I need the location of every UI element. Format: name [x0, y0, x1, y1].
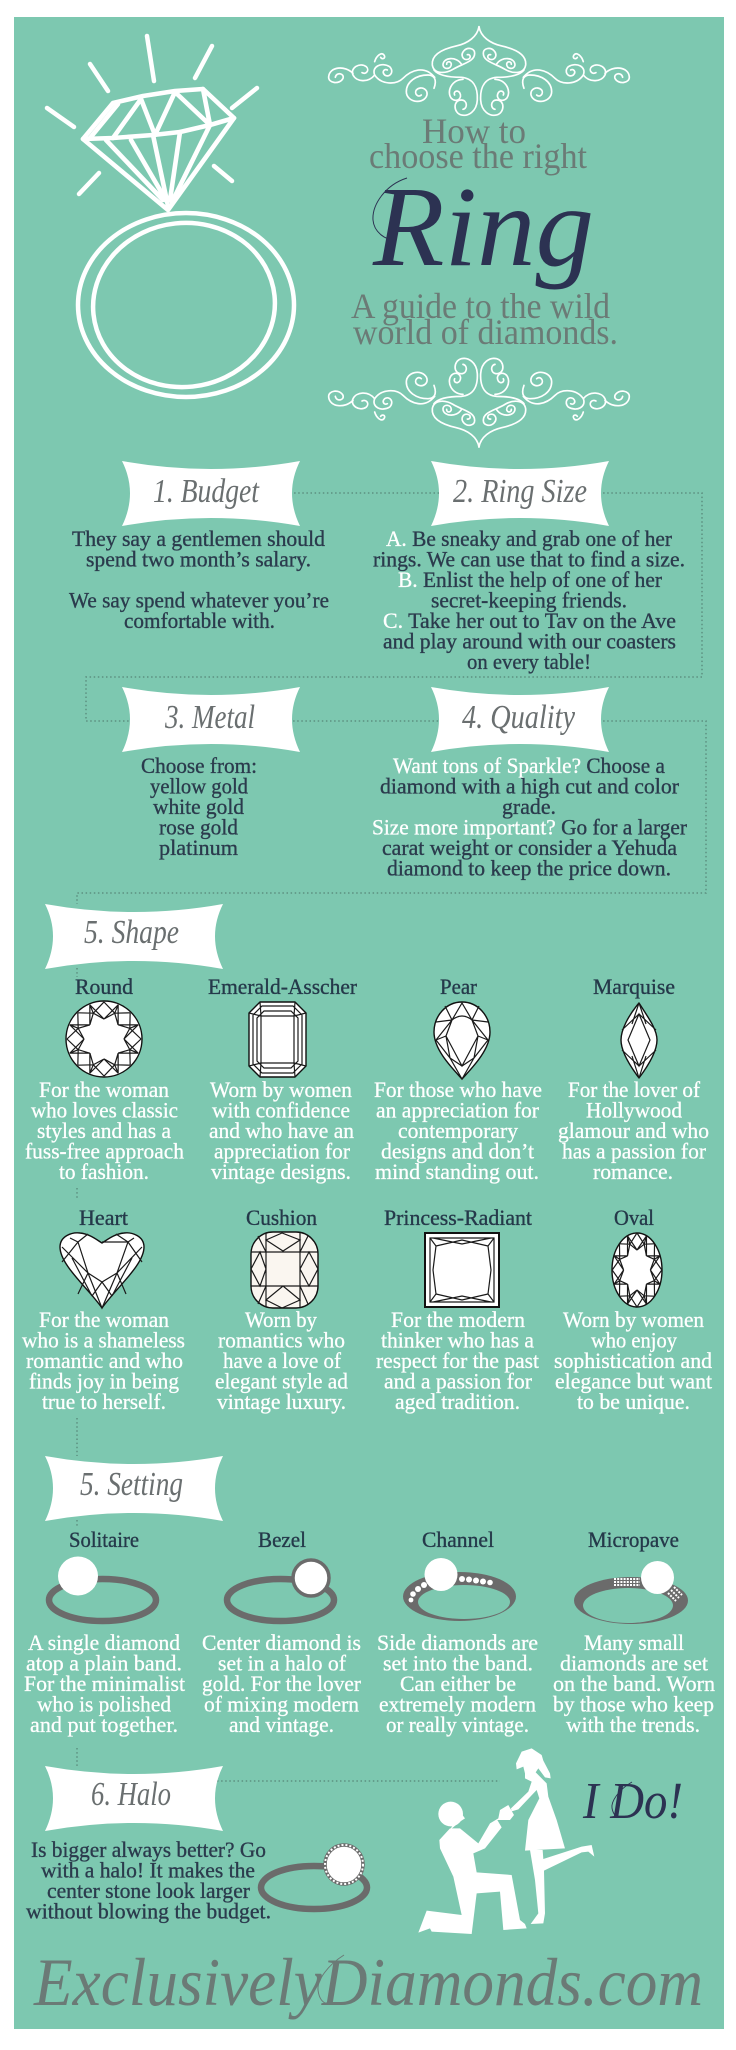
icon: solitaire ring: [49, 1556, 156, 1621]
banner: 1. Budget: 1. Budget: [153, 473, 260, 510]
icon: heart diamond: [60, 1233, 144, 1308]
text: ring size: secret-keeping friends.: [431, 588, 627, 612]
banner: 4. Quality: [431, 687, 609, 752]
text: shape descriptions row 2: [22, 1307, 713, 1414]
text: ring size: B. Enlist the help of one of her: [398, 567, 662, 592]
footer: website: ExclusivelyDiamonds.com: [33, 1944, 703, 2020]
text: setting descriptions: or really vintage.: [386, 1712, 529, 1737]
dotted connector path: [77, 493, 706, 1781]
text: setting descriptions: Side diamonds are: [377, 1630, 538, 1655]
text: shape descriptions row 1: Hollywood: [586, 1098, 682, 1122]
text: setting descriptions: of mixing modern: [204, 1692, 359, 1716]
banner: 3. Metal: 3. Metal: [164, 699, 255, 736]
title: how to choose the right: [369, 111, 587, 176]
text: setting descriptions: set in a halo of: [218, 1650, 346, 1676]
text: shape descriptions row 2: Worn by: [245, 1307, 318, 1332]
text: shape descriptions row 2: sophistication and: [554, 1348, 712, 1373]
text: shape descriptions row 2: romantics who: [218, 1328, 345, 1352]
banner: 5. Setting: [45, 1456, 223, 1521]
text: shape descriptions row 2: to be unique.: [577, 1389, 690, 1414]
setting labels: Micropave: [588, 1527, 679, 1552]
text: shape descriptions row 2: elegance but want: [555, 1368, 713, 1394]
text: shape descriptions row 1: fuss-free approach: [25, 1138, 184, 1164]
banner: 6. Halo: 6. Halo: [91, 1776, 171, 1813]
illustration: proposal couple: [418, 1748, 594, 1934]
text: shape descriptions row 2: respect for the past: [376, 1348, 540, 1373]
icon: diamond ring: [47, 36, 294, 397]
text: shape descriptions row 1: vintage designs.: [211, 1159, 351, 1184]
text: halo: with a halo! It makes the: [41, 1858, 255, 1882]
text: shape descriptions row 1: For the lover of: [568, 1077, 700, 1102]
text: quality: grade.: [502, 794, 556, 819]
text: quality: carat weight or consider a Yehuda: [382, 835, 677, 860]
text: shape descriptions row 1: an appreciation for: [376, 1098, 539, 1122]
icon: oval diamond: [607, 1225, 667, 1315]
text: ring size: on every table!: [467, 649, 591, 674]
text: shape descriptions row 2: thinker who has a: [381, 1328, 534, 1352]
text: shape descriptions row 2: romantic and who: [26, 1348, 183, 1373]
ornament: top scroll: [329, 27, 629, 115]
banner: 6. Halo: [45, 1766, 223, 1831]
text: shape descriptions row 1: [25, 1077, 709, 1184]
shape labels row 2: Princess-Radiant: [384, 1205, 533, 1230]
setting labels: Channel: [422, 1527, 494, 1552]
subtitle: [351, 286, 618, 352]
icon: marquise diamond: [621, 1003, 657, 1078]
text: shape descriptions row 1: For those who have: [374, 1077, 542, 1102]
title: how to choose the right: choose the right: [369, 136, 587, 176]
text: budget: [69, 526, 329, 633]
text: setting descriptions: and put together.: [30, 1712, 178, 1737]
text: shape descriptions row 2: true to herself.: [42, 1389, 166, 1414]
text: halo: center stone look larger: [47, 1878, 250, 1903]
text: metal: platinum: [159, 835, 238, 860]
text: setting descriptions: by those who keep: [553, 1692, 714, 1716]
text: shape descriptions row 2: and a passion for: [384, 1368, 532, 1394]
text: I Do!: I Do!: [582, 1773, 683, 1830]
text: halo: [26, 1837, 271, 1924]
shape labels row 2: Cushion: [246, 1205, 317, 1230]
text: shape descriptions row 2: vintage luxury.: [217, 1389, 346, 1414]
text: shape descriptions row 2: who is a shameless: [22, 1328, 185, 1352]
text: quality: Want tons of Sparkle? Choose a: [393, 753, 665, 778]
icon: micropave ring: [574, 1561, 688, 1624]
text: shape descriptions row 2: For the modern: [391, 1307, 525, 1332]
text: shape descriptions row 2: elegant style ad: [215, 1368, 348, 1394]
shape labels row 2: [79, 1205, 654, 1230]
text: setting descriptions: Can either be: [400, 1671, 516, 1696]
shape labels row 2: Oval: [614, 1205, 654, 1230]
text: shape descriptions row 2: For the woman: [39, 1307, 169, 1332]
icon: cushion diamond: [251, 1232, 318, 1308]
text: setting descriptions: on the band. Worn: [553, 1671, 715, 1696]
text: metal: rose gold: [159, 814, 238, 840]
text: setting descriptions: atop a plain band.: [26, 1650, 182, 1676]
text: shape descriptions row 2: who enjoy: [591, 1328, 678, 1352]
text: ring size: and play around with our coasters: [383, 628, 676, 654]
text: setting descriptions: [24, 1630, 715, 1737]
text: setting descriptions: A single diamond: [28, 1630, 180, 1655]
text: shape descriptions row 2: aged tradition.: [395, 1389, 520, 1414]
text: setting descriptions: extremely modern: [379, 1692, 536, 1716]
text: metal: Choose from:: [141, 753, 257, 778]
text: shape descriptions row 1: contemporary: [398, 1118, 519, 1143]
text: setting descriptions: Many small: [584, 1630, 684, 1655]
banner: 3. Metal: [122, 687, 300, 752]
text: ring size: C. Take her out to Tav on the Ave: [383, 608, 676, 633]
text: setting descriptions: who is polished: [37, 1692, 171, 1716]
text: shape descriptions row 2: have a love of: [223, 1348, 341, 1373]
text: shape descriptions row 2: Worn by women: [563, 1307, 704, 1332]
text: metal: white gold: [153, 794, 244, 819]
text: quality: [372, 753, 687, 880]
ornament: bottom scroll: [329, 358, 629, 447]
setting labels: [69, 1527, 679, 1552]
text: shape descriptions row 1: styles and has a: [37, 1118, 171, 1143]
subtitle: world of diamonds.: [353, 312, 618, 352]
title: how to choose the right: How to: [422, 111, 526, 151]
title: Ring: Ring: [372, 163, 594, 290]
shape labels row 1: Emerald-Asscher: [208, 974, 357, 999]
icon: channel ring: [403, 1558, 516, 1621]
subtitle: A guide to the wild: [351, 286, 610, 326]
text: budget: They say a gentlemen should: [72, 526, 325, 551]
text: metal: [141, 753, 257, 860]
icon: bezel ring: [227, 1560, 334, 1621]
text: setting descriptions: Center diamond is: [202, 1630, 361, 1655]
setting labels: Bezel: [258, 1527, 306, 1552]
text: metal: yellow gold: [150, 774, 248, 798]
banner: 1. Budget: [122, 461, 300, 526]
text: ring size: rings. We can use that to find a size.: [373, 546, 685, 572]
text: budget: spend two month’s salary.: [86, 546, 311, 572]
icon: emerald diamond: [249, 1002, 306, 1077]
text: shape descriptions row 1: Worn by women: [210, 1077, 352, 1102]
text: setting descriptions: with the trends.: [566, 1712, 700, 1737]
text: ring size: A. Be sneaky and grab one of her: [386, 526, 672, 551]
icon: halo ring: [261, 1845, 367, 1909]
text: budget: We say spend whatever you’re: [69, 588, 329, 612]
icon: round diamond: [59, 994, 149, 1084]
banner: 5. Shape: [45, 904, 223, 969]
text: setting descriptions: diamonds are set: [560, 1650, 709, 1676]
text: setting descriptions: gold. For the lover: [202, 1671, 361, 1696]
shape labels row 2: Heart: [79, 1205, 129, 1230]
text: quality: diamond with a high cut and color: [380, 774, 679, 798]
text: setting descriptions: For the minimalist: [24, 1671, 186, 1696]
text: shape descriptions row 1: to fashion.: [59, 1159, 149, 1184]
text: shape descriptions row 1: glamour and who: [558, 1118, 709, 1143]
icon: pear diamond: [434, 1002, 490, 1079]
text: shape descriptions row 1: and who have an: [209, 1118, 354, 1143]
text: setting descriptions: and vintage.: [229, 1712, 334, 1737]
text: budget: comfortable with.: [124, 608, 275, 633]
banner: 5. Shape: 5. Shape: [84, 914, 179, 951]
banner: 2. Ring Size: 2. Ring Size: [453, 473, 587, 510]
text: shape descriptions row 1: mind standing out.: [375, 1159, 539, 1184]
text: shape descriptions row 1: appreciation for: [214, 1138, 350, 1164]
text: quality: diamond to keep the price down.: [387, 856, 671, 880]
banner: 2. Ring Size: [431, 461, 609, 526]
shape labels row 1: Marquise: [593, 974, 675, 999]
banner: 5. Setting: 5. Setting: [80, 1466, 183, 1503]
setting labels: Solitaire: [69, 1527, 139, 1552]
text: ring size: [373, 526, 685, 674]
shape labels row 1: Pear: [440, 974, 477, 999]
text: setting descriptions: set into the band.: [383, 1650, 533, 1676]
text: shape descriptions row 2: finds joy in being: [29, 1368, 179, 1394]
banner: 4. Quality: 4. Quality: [462, 699, 576, 736]
text: shape descriptions row 1: with confidence: [212, 1098, 350, 1122]
text: shape descriptions row 1: who loves classic: [31, 1098, 178, 1122]
text: shape descriptions row 1: has a passion for: [562, 1138, 706, 1164]
text: halo: without blowing the budget.: [26, 1898, 271, 1924]
shape labels row 1: Round: [75, 974, 133, 999]
text: halo: Is bigger always better? Go: [31, 1837, 266, 1862]
icon: princess diamond: [425, 1233, 499, 1307]
text: shape descriptions row 1: romance.: [593, 1159, 673, 1184]
text: quality: Size more important? Go for a larger: [372, 814, 687, 840]
shape labels row 1: [75, 974, 675, 999]
text: shape descriptions row 1: For the woman: [39, 1077, 169, 1102]
text: shape descriptions row 1: designs and don’t: [381, 1138, 535, 1164]
